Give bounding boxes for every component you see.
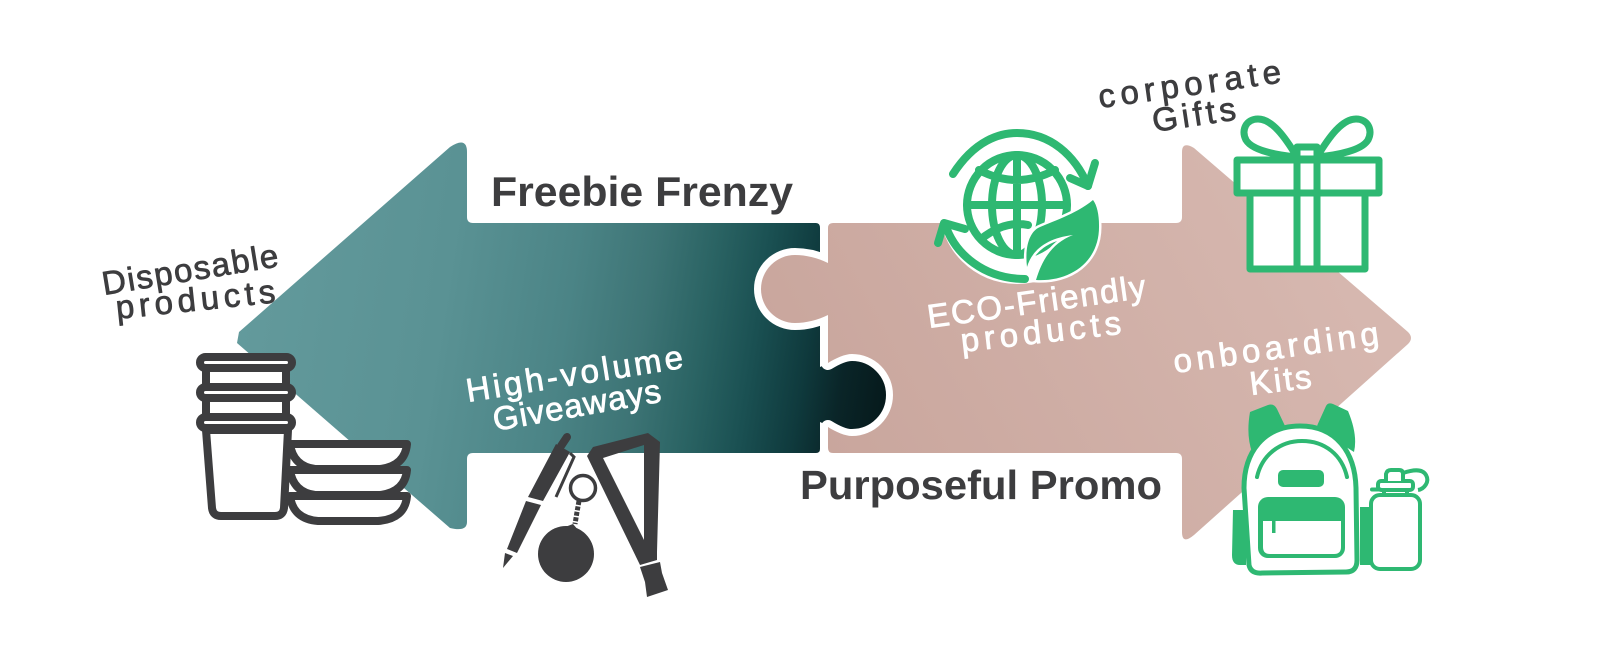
icon: pen (503, 437, 574, 568)
icon: keychain (538, 476, 596, 582)
heading: Purposeful Promo: Purposeful Promo (800, 462, 1162, 508)
icon: gift box (1237, 119, 1379, 269)
icon: backpack (1232, 403, 1373, 573)
label: Eco-Friendly products: products (959, 304, 1123, 359)
icon: water bottle (1371, 470, 1427, 569)
label: Eco-Friendly products: ECO-Friendly (925, 268, 1148, 335)
label: onboarding kits: Kits (1247, 358, 1313, 402)
pink right arrow (761, 145, 1411, 539)
label: Disposable products: Disposable (99, 237, 281, 302)
label: corporate gifts: Gifts (1150, 90, 1238, 139)
label: onboarding kits: onboarding (1171, 314, 1381, 380)
teal left arrow (237, 143, 887, 529)
label: Disposable products: products (114, 272, 277, 326)
icon: globe with recycling arrows and leaf (938, 128, 1099, 284)
icon: stacked cups (200, 357, 292, 516)
label: High-volume giveaways: High-volume (463, 338, 685, 409)
heading: Freebie Frenzy: Freebie Frenzy (491, 168, 794, 215)
label: corporate gifts: corporate (1096, 53, 1283, 115)
icon: lanyard (587, 433, 668, 597)
label: High-volume giveaways: Giveaways (490, 372, 664, 438)
icon: stacked bowls (290, 444, 407, 521)
